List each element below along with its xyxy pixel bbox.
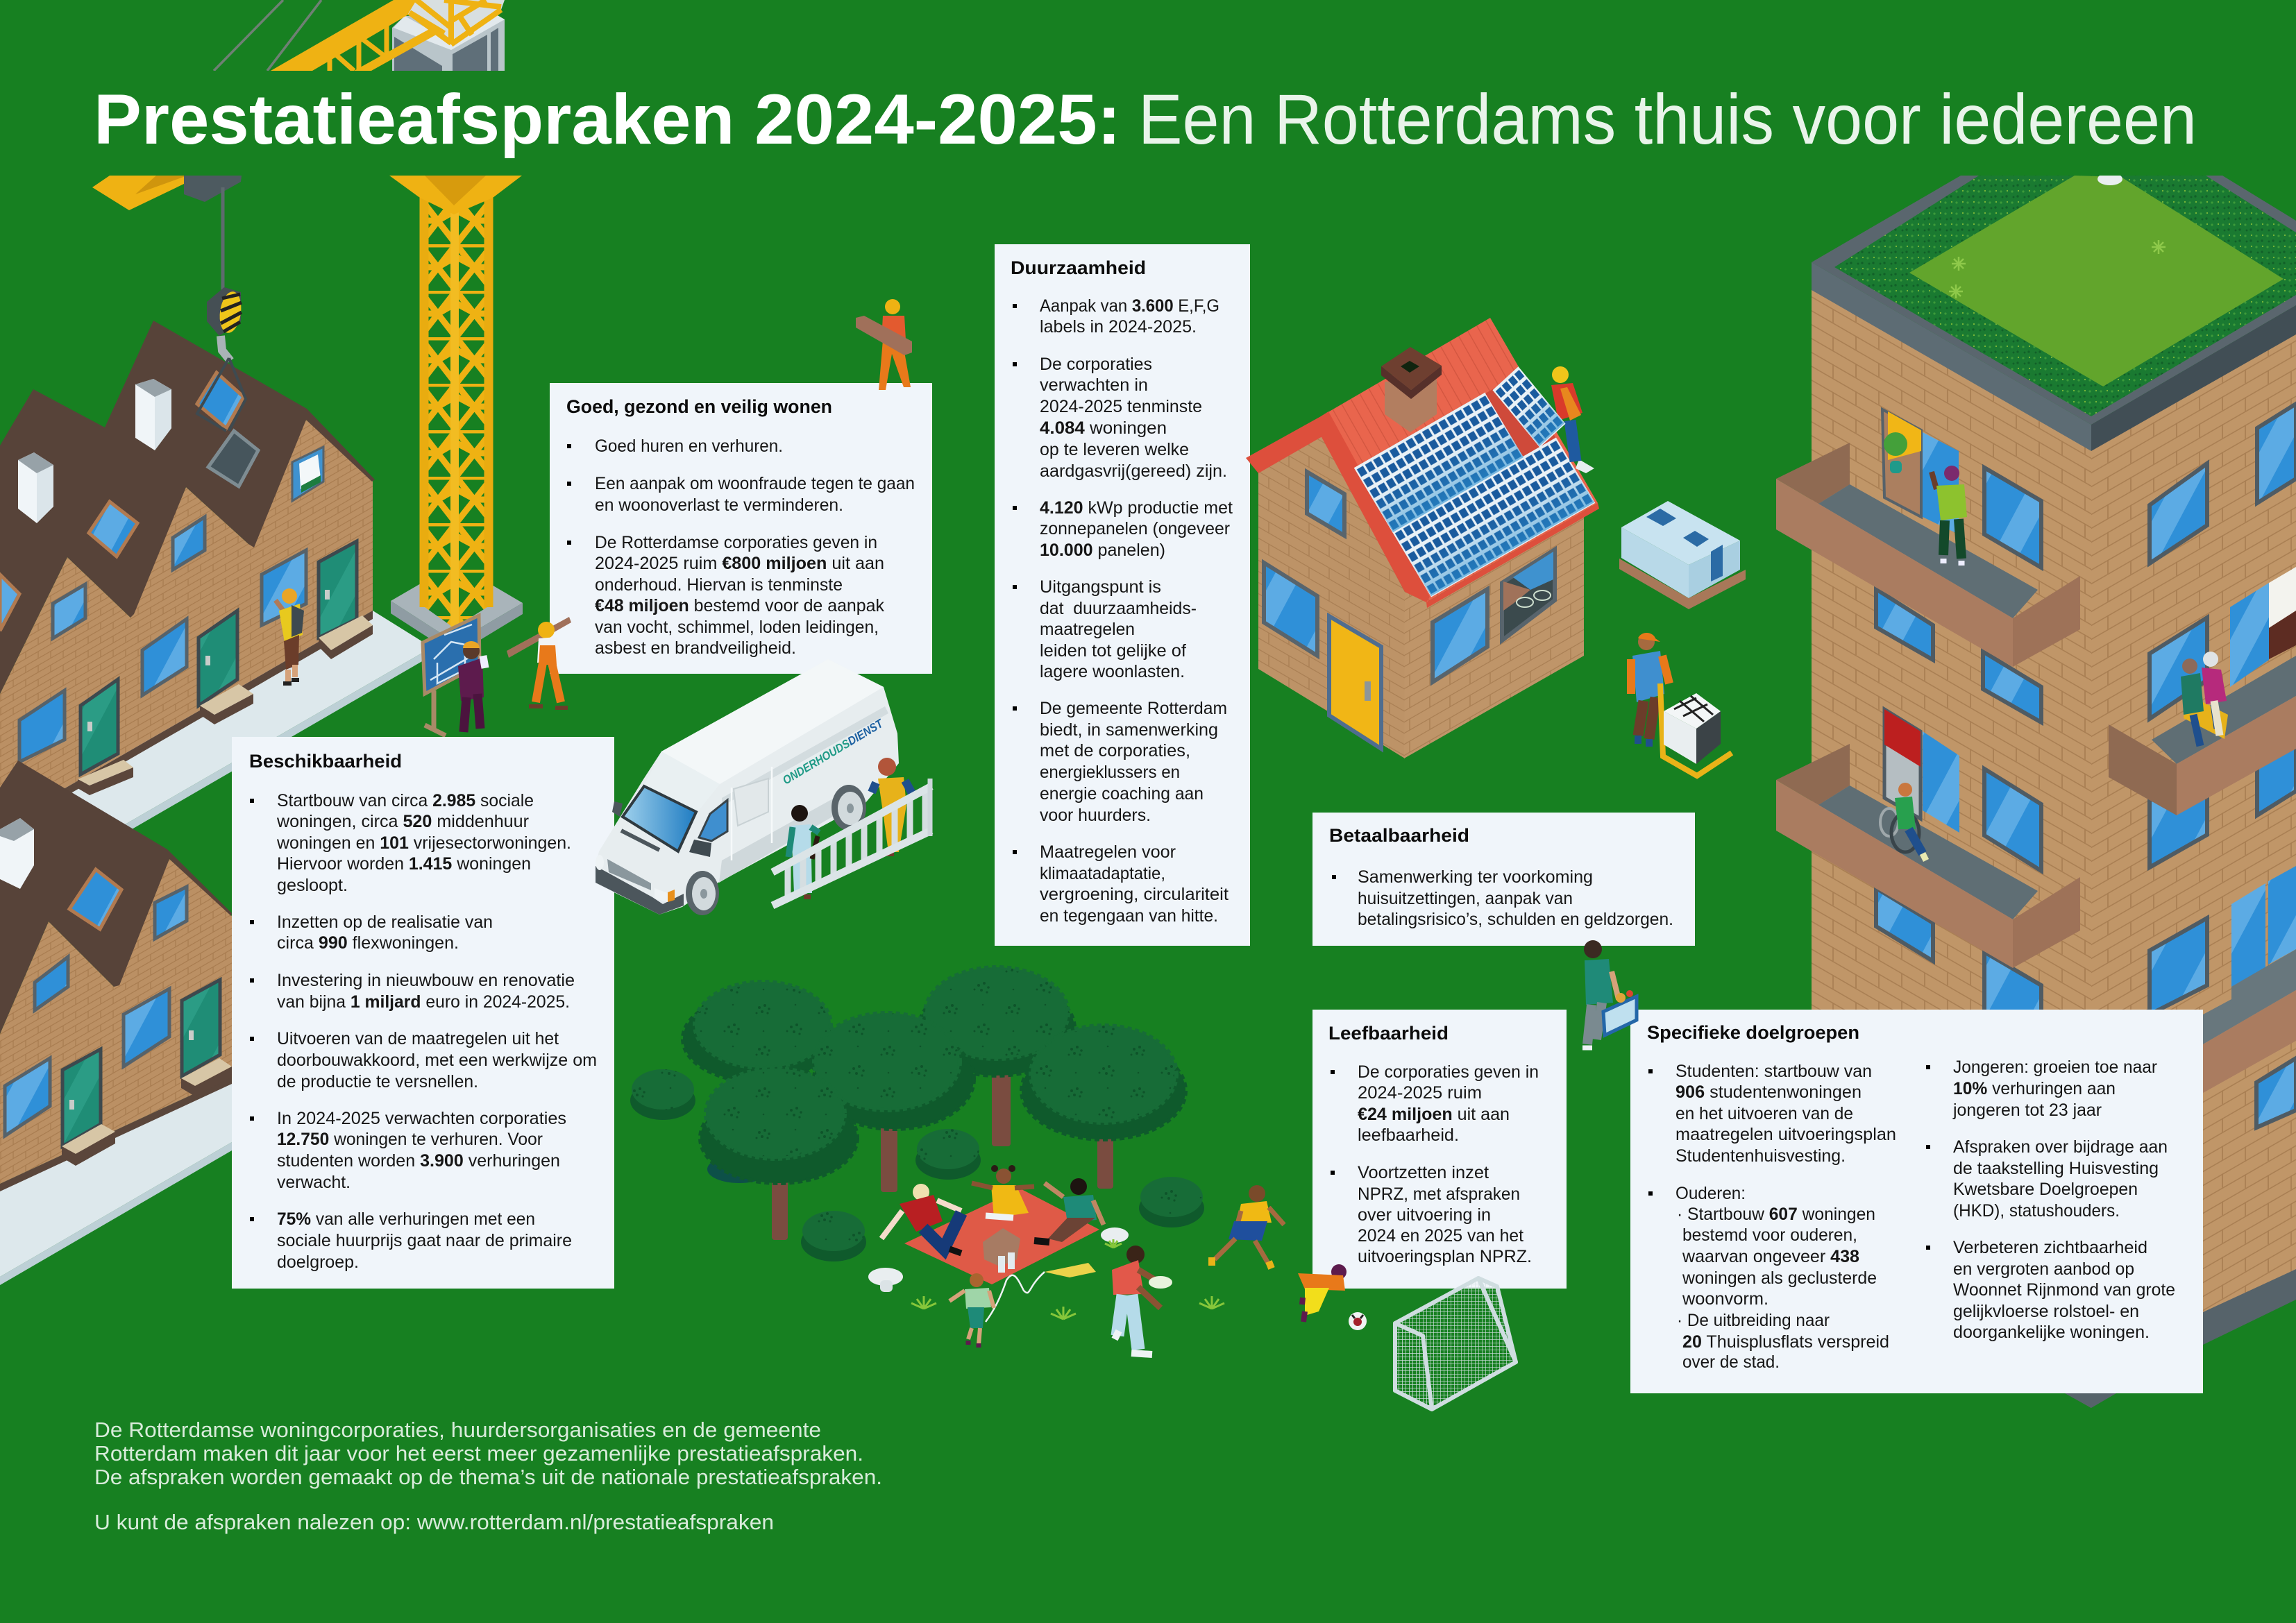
intro text: De Rotterdamse woningcorporaties, huurdersorganisaties en de gemeente xyxy=(94,1418,821,1442)
bullet: woonnet xyxy=(1926,1238,2175,1342)
tree front left xyxy=(700,1069,857,1183)
bullet: ouderen xyxy=(1648,1184,1889,1372)
title xyxy=(94,80,2197,159)
bullet: uitgangspunt: maatregelen xyxy=(1040,620,1135,639)
bullet: afspraken HKD: Kwetsbare Doelgroepen xyxy=(1953,1180,2138,1199)
tree trunks xyxy=(772,1072,1113,1240)
bullet: uitgangspunt: lagere woonlasten. xyxy=(1040,662,1185,681)
bullet: primaire doelgroep: 75% van alle verhuringen met een xyxy=(277,1209,535,1229)
bullet: uitgangspunt: dat duurzaamheids- xyxy=(1040,599,1197,618)
illustration: upper row of terraced houses xyxy=(0,321,432,906)
illustration: picnic family xyxy=(881,1165,1104,1273)
bullet: studenten xyxy=(1648,1062,1896,1166)
bullet: aardgasvrij: De corporaties xyxy=(1040,355,1152,374)
bullet: ouderen: woonvorm. xyxy=(1682,1289,1769,1309)
roof windows xyxy=(0,373,244,631)
heading: Duurzaamheid xyxy=(1011,257,1146,278)
solar panels xyxy=(1355,375,1594,596)
bullet: onderhoud: asbest en brandveiligheid. xyxy=(595,638,796,658)
bullet: klimaatadaptatie: vergroening, circulariteit xyxy=(1040,885,1229,904)
bullet: ouderen: 20 Thuisplusflats verspreid xyxy=(1682,1332,1889,1352)
bullet: doorbouwakkoord xyxy=(250,1029,597,1091)
bullet: afspraken HKD xyxy=(1926,1137,2168,1221)
person: child with kite xyxy=(949,1273,994,1348)
bullet: studenten: Studenten: startbouw van xyxy=(1675,1062,1872,1081)
picnic bag and bottles xyxy=(983,1228,1020,1273)
base strip xyxy=(2065,1269,2296,1408)
bullet: huisuitzettingen: betalingsrisico’s, schulden en geldzorgen. xyxy=(1358,910,1673,929)
bullet: woonnet: Verbeteren zichtbaarheid xyxy=(1953,1238,2147,1257)
to-let sign window xyxy=(292,447,323,501)
illustration: bushes xyxy=(630,1069,1204,1261)
bullet: primaire doelgroep xyxy=(250,1209,572,1272)
bullet: studenten: maatregelen uitvoeringsplan xyxy=(1675,1125,1896,1144)
illustration: kite xyxy=(986,1263,1096,1322)
intro text xyxy=(94,1418,882,1534)
bullet: onderhoud: De Rotterdamse corporaties geven in xyxy=(595,533,877,552)
bullet: studenten: en het uitvoeren van de xyxy=(1675,1104,1853,1123)
illustration: lifted roof window xyxy=(197,358,258,486)
illustration: construction blueprint board xyxy=(423,615,480,736)
person: delivery man with stove on trolley xyxy=(1631,633,1732,776)
balcony: right xyxy=(2109,656,2296,815)
illustration: crane jib, trolley and hook xyxy=(92,176,244,361)
illustration: picnic blanket xyxy=(904,1189,1099,1284)
bullet: studenten: 906 studentenwoningen xyxy=(1675,1082,1862,1102)
bullet: aardgasvrij: 2024-2025 tenminste xyxy=(1040,397,1202,416)
bullet: jongeren: Jongeren: groeien toe naar xyxy=(1953,1057,2157,1077)
bullet: NPRZ: uitvoeringsplan NPRZ. xyxy=(1358,1247,1532,1266)
intro text: U kunt de afspraken nalezen op: www.rotterdam.nl/prestatieafspraken xyxy=(94,1510,774,1534)
bullet: labels xyxy=(1013,296,1219,337)
van bumper and grille xyxy=(596,855,684,915)
person: worker with beam on top of panel xyxy=(856,299,912,390)
chimney: lower xyxy=(0,818,34,889)
bullet: investering: van bijna 1 miljard euro in 2024-2025. xyxy=(277,992,570,1012)
bullet: NPRZ: NPRZ, met afspraken xyxy=(1358,1184,1520,1204)
panel: beschikbaarheid xyxy=(232,737,614,1289)
bullet: ouderen: over de stad. xyxy=(1682,1352,1780,1372)
bullet: miljoen leefbaarheid xyxy=(1331,1062,1539,1145)
tree right xyxy=(1022,1026,1185,1139)
heading: Betaalbaarheid xyxy=(1329,825,1469,846)
bullet: primaire doelgroep: doelgroep. xyxy=(277,1252,359,1272)
solar house chimney xyxy=(1381,347,1442,432)
van lettering: ONDERHOUDSDIENST xyxy=(780,716,886,787)
tree back right xyxy=(919,967,1074,1076)
title: Prestatieafspraken 2024-2025: xyxy=(94,80,1121,159)
bullet: gemeente: biedt, in samenwerking xyxy=(1040,720,1218,740)
person: man in red xyxy=(881,1184,961,1253)
bullet: NPRZ: 2024 en 2025 van het xyxy=(1358,1226,1523,1246)
bullet: startbouw: Hiervoor worden 1.415 woningen xyxy=(277,854,531,874)
bullet: startbouw xyxy=(250,791,571,895)
bullet: jongeren xyxy=(1926,1057,2157,1120)
person: worker carrying plank xyxy=(507,617,571,708)
green roof xyxy=(1812,173,2296,451)
bullet: uitgangspunt: leiden tot gelijke of xyxy=(1040,641,1186,661)
bullet: NPRZ: Voortzetten inzet xyxy=(1358,1163,1489,1182)
bullet: aardgasvrij xyxy=(1013,355,1227,481)
balcony: lower right xyxy=(2203,949,2296,1093)
lifted solar panel xyxy=(1494,368,1564,446)
illustration: ladder xyxy=(773,779,931,906)
icon: football xyxy=(1349,1312,1367,1330)
bullet: flexwoningen: Inzetten op de realisatie van xyxy=(277,912,493,932)
doors xyxy=(81,541,357,774)
bullet: woonnet: doorgankelijke woningen. xyxy=(1953,1323,2150,1342)
bullet: jongeren: 10% verhuringen aan xyxy=(1953,1079,2116,1098)
bullet: onderhoud: onderhoud. Hiervan is tenminste xyxy=(595,575,843,595)
chimney: upper right xyxy=(135,379,171,450)
panel: leefbaarheid xyxy=(1312,1010,1567,1289)
person: woman in yellow overalls behind ladder xyxy=(872,758,913,856)
bullet: jongeren: jongeren tot 23 jaar xyxy=(1952,1101,2102,1120)
bullet: startbouw: woningen, circa 520 middenhuur xyxy=(276,812,529,831)
heading: Beschikbaarheid xyxy=(249,751,402,772)
heading: Specifieke doelgroepen xyxy=(1647,1022,1859,1043)
windows right face xyxy=(2150,404,2296,1128)
kitchen window xyxy=(1502,550,1555,640)
yellow front door xyxy=(1329,616,1381,749)
bullet: onderhoud: €48 miljoen bestemd voor de aanpak xyxy=(595,596,884,615)
bullet: investering xyxy=(250,971,575,1012)
panel: specifieke doelgroepen xyxy=(1630,1010,2203,1393)
bullet: verhuren: In 2024-2025 verwachten corporaties xyxy=(277,1109,566,1128)
person: worker looking at house xyxy=(276,588,304,683)
person: man with shopping basket xyxy=(1582,940,1637,1048)
bullet: flexwoningen: circa 990 flexwoningen. xyxy=(277,933,459,953)
bullet: gemeente: energieklussers en xyxy=(1040,763,1180,782)
solar house roof xyxy=(1246,318,1599,608)
balcony: upper left xyxy=(1776,443,2080,667)
intro text: De afspraken worden gemaakt op de thema’s uit de nationale prestatieafspraken. xyxy=(94,1465,882,1489)
bullet: huisuitzettingen: Samenwerking ter voorkoming xyxy=(1358,867,1593,887)
bullet: woonnet: gelijkvloerse rolstoel- en xyxy=(1953,1302,2139,1321)
bullet: verhuren: studenten worden 3.900 verhuringen xyxy=(277,1151,560,1171)
illustration: crane top cut off above the title xyxy=(214,0,505,71)
bullet: uitgangspunt xyxy=(1013,577,1197,681)
person: architect in purple xyxy=(458,641,489,732)
bullet: labels: Aanpak van 3.600 E,F,G xyxy=(1040,296,1219,316)
chimney: upper left xyxy=(18,452,53,523)
bullet: ouderen: Ouderen: xyxy=(1675,1184,1746,1203)
bullet: NPRZ xyxy=(1331,1163,1532,1266)
illustration: park trees xyxy=(683,967,1185,1240)
windows left face xyxy=(1876,468,2041,1027)
balcony: lower left xyxy=(1776,744,2080,968)
bullet: onderhoud: van vocht, schimmel, loden leidingen, xyxy=(595,618,879,637)
heading: Leefbaarheid xyxy=(1328,1023,1449,1044)
bullet: gemeente: energie coaching aan xyxy=(1040,784,1204,804)
bullet: startbouw: woningen en 101 vrijesectorwoningen. xyxy=(276,833,571,853)
illustration: house with solar panels xyxy=(1246,318,1599,758)
bullet: zonnepanelen: zonnepanelen (ongeveer xyxy=(1040,519,1230,538)
person: woman waving on balcony xyxy=(1932,466,1967,566)
bullet: huisuitzettingen xyxy=(1332,867,1673,929)
roof window: lower xyxy=(69,869,121,929)
bullet: woonfraude xyxy=(567,474,915,515)
bullet: afspraken HKD: de taakstelling Huisvesting xyxy=(1953,1159,2159,1178)
person: worker installing solar panel xyxy=(1494,366,1594,473)
bullet: uitgangspunt: Uitgangspunt is xyxy=(1040,577,1161,597)
illustration: white maintenance van xyxy=(596,659,899,915)
bullet: startbouw: gesloopt. xyxy=(277,876,348,895)
bullet: investering: Investering in nieuwbouw en renovatie xyxy=(277,971,575,990)
bullet: doorbouwakkoord: doorbouwakkoord, met een werkwijze om xyxy=(277,1051,597,1070)
solar house windows xyxy=(1264,472,1487,682)
illustration: rocks and grass xyxy=(868,1227,1224,1319)
panel: goed, gezond en veilig wonen xyxy=(550,383,932,674)
bullet: labels: labels in 2024-2025. xyxy=(1040,317,1197,337)
bullet: zonnepanelen: 10.000 panelen) xyxy=(1040,541,1165,560)
bullet: klimaatadaptatie: Maatregelen voor xyxy=(1040,842,1176,862)
bullet: klimaatadaptatie xyxy=(1013,842,1229,926)
person: man in blue apron xyxy=(788,805,819,899)
heading: Goed, gezond en veilig wonen xyxy=(566,396,832,417)
bullet: zonnepanelen: 4.120 kWp productie met xyxy=(1040,498,1233,518)
bullet: woonnet: Woonnet Rijnmond van grote xyxy=(1953,1280,2175,1300)
door steps: lower row xyxy=(62,1058,232,1166)
bullet: gemeente xyxy=(1013,699,1227,825)
person: elderly couple on bench xyxy=(2181,652,2228,746)
bullet: woonfraude: en woonoverlast te verminderen. xyxy=(595,495,843,515)
person: woman in teal xyxy=(1034,1178,1104,1242)
bullet: doorbouwakkoord: Uitvoeren van de maatregelen uit het xyxy=(277,1029,559,1048)
bullet: onderhoud xyxy=(567,533,884,658)
bullet: huisuitzettingen: huisuitzettingen, aanpak van xyxy=(1358,889,1573,908)
bullet: ouderen: · Startbouw 607 woningen xyxy=(1677,1205,1875,1224)
upper door with balcony xyxy=(1882,409,1959,534)
doors: lower row xyxy=(62,980,220,1146)
title: Een Rotterdams thuis voor iedereen xyxy=(1138,80,2197,159)
person: boy in yellow shirt xyxy=(1212,1185,1284,1268)
lower right balcony door xyxy=(2231,866,2296,987)
bullet: miljoen leefbaarheid: 2024-2025 ruim xyxy=(1358,1083,1482,1103)
person: child with football xyxy=(1298,1264,1347,1322)
bullet: ouderen: bestemd voor ouderen, xyxy=(1682,1225,1857,1245)
bullet: verhuren xyxy=(250,1109,566,1192)
bullet: miljoen leefbaarheid: leefbaarheid. xyxy=(1358,1125,1459,1145)
bullet: afspraken HKD: (HKD), statushouders. xyxy=(1953,1201,2120,1221)
bullet: aardgasvrij: 4.084 woningen xyxy=(1040,418,1167,438)
right face balcony door xyxy=(2230,567,2296,687)
bullet: ouderen: · De uitbreiding naar xyxy=(1677,1311,1830,1330)
bullet: verhuren: 12.750 woningen te verhuren. Voor xyxy=(277,1130,543,1149)
illustration: pallet of insulation packs xyxy=(1619,501,1746,609)
bullet: studenten: Studentenhuisvesting. xyxy=(1675,1146,1846,1166)
bullet: zonnepanelen xyxy=(1013,498,1233,560)
bullet: woonfraude: Een aanpak om woonfraude tegen te gaan xyxy=(595,474,915,493)
bullet: miljoen leefbaarheid: €24 miljoen uit aan xyxy=(1358,1105,1510,1124)
illustration: football goal xyxy=(1395,1278,1516,1409)
bullet: flexwoningen xyxy=(250,912,493,953)
bullet: woonnet: en vergroten aanbod op xyxy=(1953,1259,2134,1279)
bullet: aardgasvrij: op te leveren welke xyxy=(1040,440,1189,459)
bullet: onderhoud: 2024-2025 ruim €800 miljoen uit aan xyxy=(595,554,884,573)
tree centre xyxy=(814,1013,974,1129)
bullet: goed huren: Goed huren en verhuren. xyxy=(595,436,783,456)
stove xyxy=(1664,693,1721,764)
tree back left xyxy=(683,982,833,1082)
bullet: aardgasvrij: verwachten in xyxy=(1040,375,1148,395)
intro text: Rotterdam maken dit jaar voor het eerst meer gezamenlijke prestatieafspraken. xyxy=(94,1441,863,1465)
person: man with frisbee xyxy=(1112,1246,1172,1354)
windows: lower row xyxy=(5,887,187,1136)
van wheels xyxy=(686,785,866,915)
basket xyxy=(1603,990,1637,1035)
bullet: gemeente: De gemeente Rotterdam xyxy=(1040,699,1227,718)
windows xyxy=(19,517,306,762)
lower door with balcony xyxy=(1884,709,1959,833)
person: girl in yellow xyxy=(972,1165,1034,1218)
bullet: aardgasvrij: aardgasvrij(gereed) zijn. xyxy=(1040,461,1227,481)
bullet: verhuren: verwacht. xyxy=(277,1173,351,1192)
person: wheelchair user xyxy=(1880,783,1926,860)
bullet: klimaatadaptatie: klimaatadaptatie, xyxy=(1040,864,1165,883)
bullet: ouderen: woningen als geclusterde xyxy=(1682,1268,1877,1288)
bullet: NPRZ: over uitvoering in xyxy=(1358,1205,1491,1225)
bullet: doorbouwakkoord: de productie te versnellen. xyxy=(277,1072,478,1091)
van windshield xyxy=(623,786,696,851)
illustration: apartment building xyxy=(1776,173,2296,1408)
bullet: ouderen: waarvan ongeveer 438 xyxy=(1682,1247,1859,1266)
bullet: startbouw: Startbouw van circa 2.985 sociale xyxy=(277,791,534,810)
illustration: crane tower xyxy=(389,176,523,655)
door steps xyxy=(78,615,373,795)
panel: betaalbaarheid xyxy=(1312,813,1695,946)
bullet: primaire doelgroep: sociale huurprijs gaat naar de primaire xyxy=(277,1231,572,1250)
bullet: klimaatadaptatie: en tegengaan van hitte. xyxy=(1040,906,1218,926)
van side window and mirrors xyxy=(612,800,727,857)
bullet: gemeente: voor huurders. xyxy=(1040,806,1151,825)
panel: duurzaamheid xyxy=(995,244,1250,946)
bullet: gemeente: met de corporaties, xyxy=(1040,741,1190,760)
bullet: afspraken HKD: Afspraken over bijdrage aan xyxy=(1953,1137,2168,1157)
illustration: lower row of terraced houses xyxy=(0,760,232,1285)
bullet: miljoen leefbaarheid: De corporaties geven in xyxy=(1358,1062,1539,1082)
